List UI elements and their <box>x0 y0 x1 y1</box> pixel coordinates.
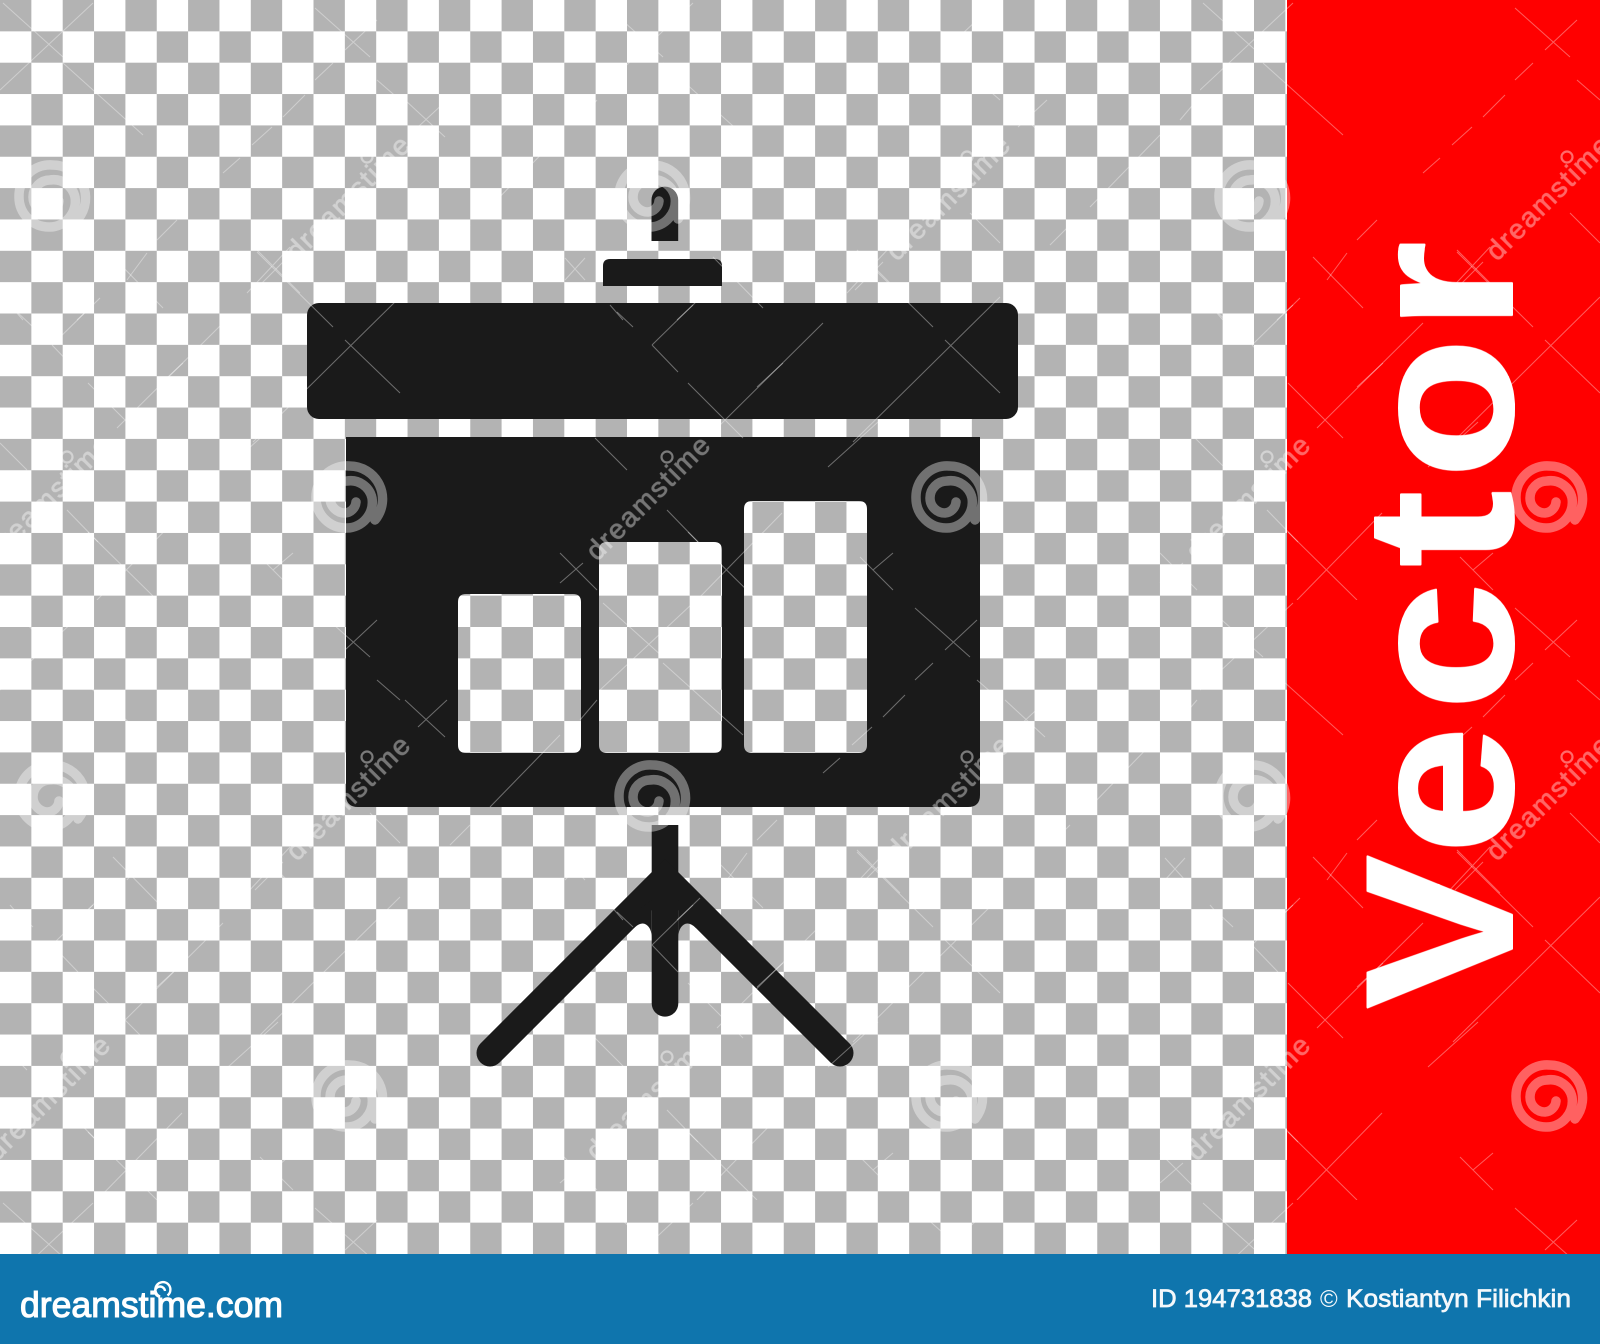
footer credit: image id and author <box>1151 1285 1571 1313</box>
panel: blue footer bar <box>0 1254 1600 1344</box>
footer logo: dreamstime.com: dreamstime.com <box>20 1284 283 1325</box>
watermark: diagonal dreamstime text <box>0 128 1600 1166</box>
panel: red vector band <box>1287 0 1600 1254</box>
chart: screen with rising bars cut out <box>346 437 980 807</box>
watermark: diagonal dreamstime text: dreamstime <box>1179 428 1317 566</box>
icon: presentation board <box>307 187 1018 1053</box>
footer credit: image id and author: Kostiantyn Filichkin <box>1346 1285 1571 1313</box>
watermark: spirals <box>19 165 1583 1127</box>
icon part: roller header <box>307 303 1018 419</box>
heading: vertical Vector label: Vector <box>1322 228 1557 1009</box>
watermark: diagonal dreamstime text: dreamstime <box>279 728 417 866</box>
watermark: diagonal dreamstime text: dreamstime <box>879 128 1017 266</box>
watermark: diagonal dreamstime text: dreamstime <box>579 428 717 566</box>
watermark: diagonal dreamstime text: dreamstime <box>279 128 417 266</box>
icon part: hanging bracket <box>603 259 722 286</box>
watermark: diagonal dreamstime text: dreamstime <box>579 1028 717 1166</box>
icon part: tripod stand <box>490 825 840 1053</box>
watermark: diagonal dreamstime text: dreamstime <box>879 728 1017 866</box>
watermark: diagonal dreamstime text: dreamstime <box>1179 1028 1317 1166</box>
footer credit: image id and author: © <box>1320 1286 1338 1313</box>
icon part: top knob <box>652 187 678 241</box>
icon: logo spiral <box>155 1282 170 1296</box>
footer credit: image id and author: ID 194731838 <box>1151 1285 1312 1313</box>
panel: transparency checkerboard background <box>0 0 1287 1254</box>
